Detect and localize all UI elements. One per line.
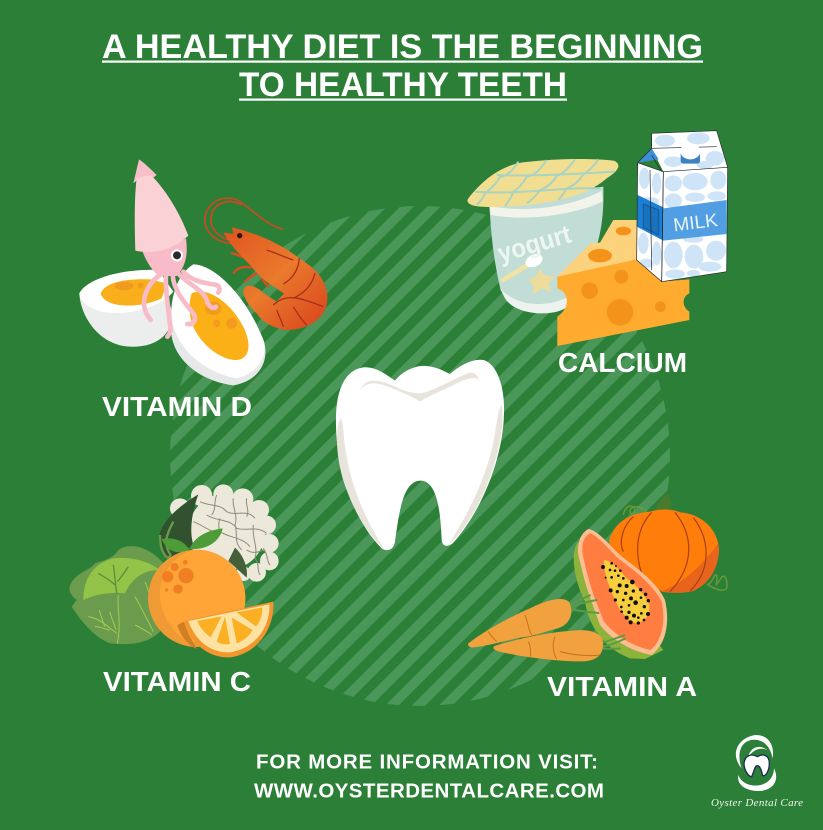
title: A HEALTHY DIET IS THE BEGINNING bbox=[102, 28, 703, 66]
icon: cheese bbox=[557, 220, 689, 346]
text: yogurt: yogurt bbox=[494, 219, 575, 268]
striped circle backdrop bbox=[170, 206, 670, 706]
icon: squid bbox=[133, 159, 219, 337]
label: vitamin D: VITAMIN D bbox=[102, 391, 252, 422]
footer call to action bbox=[254, 750, 604, 802]
label: vitamin C: VITAMIN C bbox=[103, 666, 251, 697]
icon: whole orange bbox=[148, 550, 245, 647]
icon: shrimp bbox=[205, 198, 327, 330]
title: TO HEALTHY TEETH bbox=[239, 66, 567, 104]
logo: Oyster Dental Care: Oyster Dental Care bbox=[711, 797, 803, 809]
icon: cauliflower bbox=[159, 484, 279, 582]
icon: papaya bbox=[574, 529, 667, 659]
title bbox=[102, 28, 703, 104]
footer call to action: FOR MORE INFORMATION VISIT: bbox=[256, 750, 598, 774]
text: milk: MILK bbox=[672, 209, 720, 235]
logo: Oyster Dental Care bbox=[711, 735, 803, 809]
icon: orange slice bbox=[177, 602, 273, 657]
tooth bbox=[336, 360, 504, 550]
icon: right boiled egg bbox=[171, 264, 265, 385]
panel: vitamin D foods bbox=[79, 159, 327, 385]
label: vitamin A: VITAMIN A bbox=[547, 671, 697, 702]
icon: upper carrot bbox=[468, 599, 571, 647]
footer call to action: WWW.OYSTERDENTALCARE.COM bbox=[254, 780, 604, 802]
panel: vitamin A foods bbox=[468, 493, 727, 661]
icon: cabbage bbox=[69, 546, 165, 644]
panel: vitamin C foods bbox=[69, 484, 279, 657]
label: calcium: CALCIUM bbox=[558, 347, 687, 378]
icon: yogurt bbox=[467, 159, 618, 313]
icon: pumpkin bbox=[609, 493, 727, 593]
icon: left boiled egg bbox=[79, 270, 173, 347]
icon: carrot tops bbox=[569, 595, 626, 649]
icon: orange leaves bbox=[162, 528, 223, 552]
panel: calcium foods bbox=[467, 131, 728, 346]
icon: lower carrot bbox=[494, 630, 603, 661]
icon: milk carton bbox=[637, 131, 728, 282]
